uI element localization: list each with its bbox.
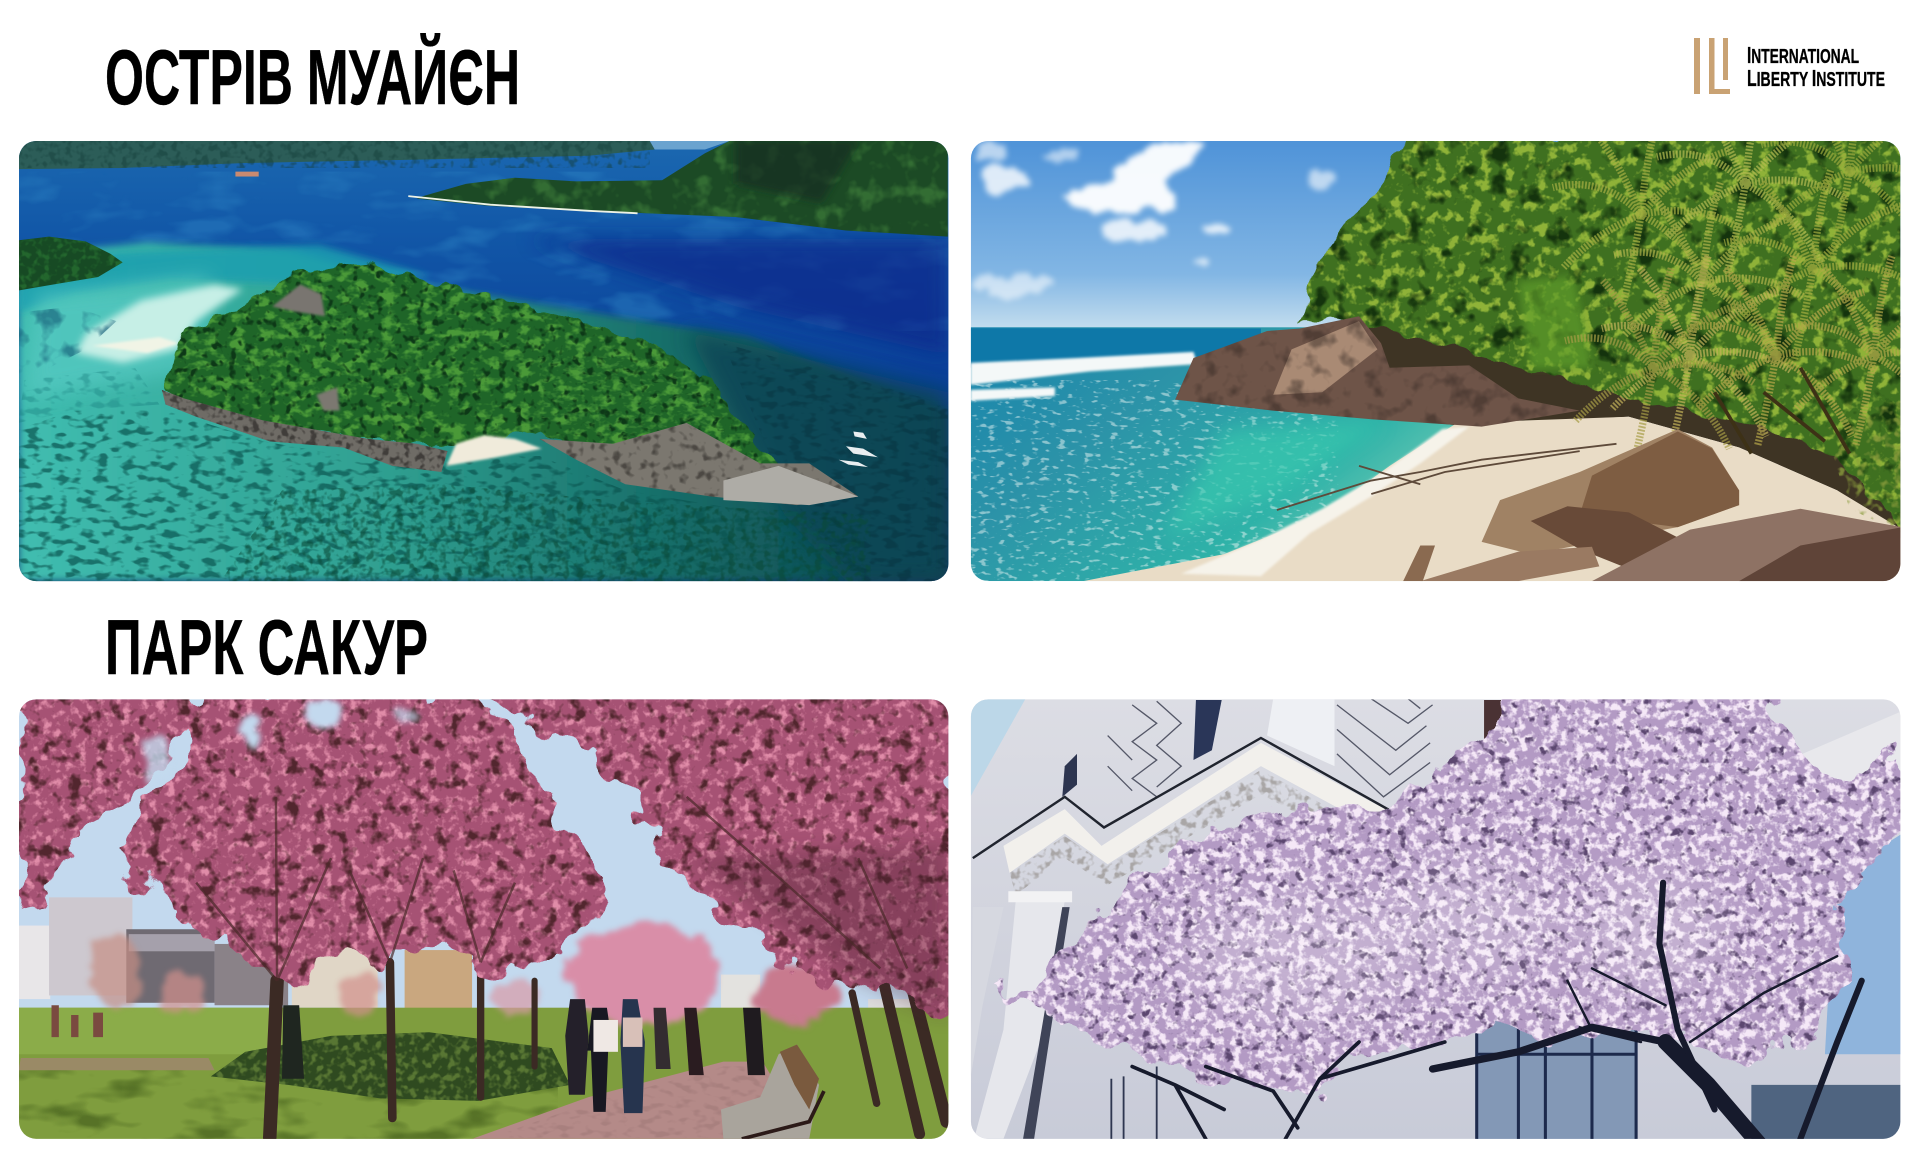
photo: tropical beach with palms and granite boulders <box>970 141 1900 582</box>
rusticated stone lines <box>1108 699 1433 797</box>
far sakura <box>92 923 841 1026</box>
woman on bench <box>721 1044 824 1139</box>
boat <box>235 172 259 177</box>
photo: sakura in front of a classical building <box>970 687 1911 1146</box>
island: top right headland <box>408 141 948 237</box>
blossom mass <box>997 687 1911 1091</box>
sky corner <box>970 699 1026 797</box>
palm fronds <box>1552 141 1900 450</box>
buildings <box>18 897 944 1030</box>
white beach <box>446 435 542 466</box>
sakura canopy <box>18 687 956 1024</box>
granite headland <box>1175 316 1580 427</box>
sky <box>970 141 1902 331</box>
logo: International Liberty Institute <box>1694 38 1885 94</box>
breaking waves <box>970 352 1197 401</box>
dark branches <box>1132 883 1862 1146</box>
path <box>472 1062 809 1139</box>
visitors <box>51 999 765 1113</box>
lawn <box>18 1008 950 1140</box>
granite shoreline <box>162 390 448 472</box>
horizon strip <box>650 141 730 150</box>
deep sea <box>18 141 950 582</box>
title: Парк сакур: ПАРК САКУР <box>105 603 428 691</box>
logo mark <box>1694 38 1730 94</box>
rock outcrop <box>272 284 325 316</box>
sand shoal <box>76 284 243 363</box>
logo wordmark: LIBERTY INSTITUTE <box>1747 65 1885 91</box>
photo: aerial view of Moyenne island <box>18 141 950 582</box>
columns <box>970 891 1072 1139</box>
bushes <box>211 1032 570 1101</box>
distant land <box>18 141 655 169</box>
clouds <box>972 142 1336 295</box>
sand beach <box>1083 417 1902 581</box>
sea <box>970 327 1454 581</box>
bright blossom highlights <box>1187 864 1727 1017</box>
sky holes in canopy <box>145 702 413 782</box>
island: main <box>162 262 858 505</box>
wave marks <box>839 432 878 467</box>
boulders <box>1403 429 1902 581</box>
forest floor <box>1359 316 1902 539</box>
photo: alley of pink sakura in the park <box>18 687 956 1140</box>
canopy shade <box>687 846 948 1017</box>
windows <box>1062 700 1902 1140</box>
driftwood <box>1277 444 1616 510</box>
sky <box>18 699 950 1042</box>
island: small left <box>18 237 123 291</box>
shallow reef water <box>18 243 948 581</box>
corner pilaster <box>1267 699 1334 766</box>
facade <box>970 699 1902 1140</box>
title: Острів Муайєн: ОСТРІВ МУАЙЄН <box>105 33 520 121</box>
branches <box>196 797 907 981</box>
jungle <box>1297 141 1900 532</box>
gravel track <box>18 1058 215 1070</box>
logo wordmark: INTERNATIONAL <box>1747 42 1859 68</box>
logo wordmark <box>1747 42 1885 91</box>
trunks <box>270 962 947 1138</box>
cornice <box>973 711 1902 895</box>
reef speckles <box>18 411 864 581</box>
